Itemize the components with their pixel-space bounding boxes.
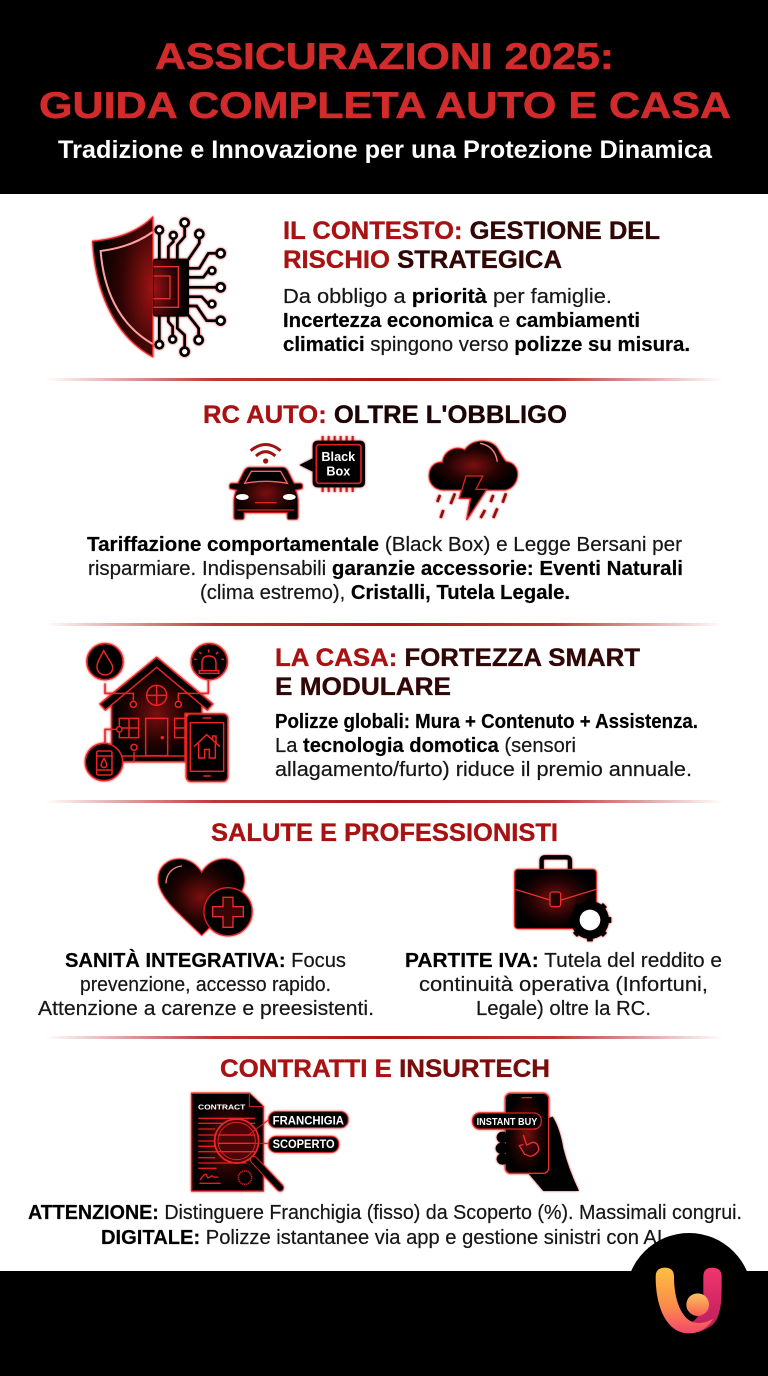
icon: black box chip: Black [321, 450, 356, 464]
subtitle: Tradizione e Innovazione per una Protezione Dinamica [58, 136, 713, 164]
body text: (clima estremo), Cristalli, Tutela Legale. [200, 582, 570, 604]
text: sanità integrativa: SANITÀ INTEGRATIVA: Focus [65, 949, 346, 972]
body text: Tariffazione comportamentale (Black Box) e Legge Bersani per [87, 534, 682, 556]
body text: Polizze globali: Mura + Contenuto + Assistenza. [275, 711, 698, 733]
body text: La tecnologia domotica (sensori [275, 735, 576, 757]
body text: Da obbligo a priorità per famiglie. [283, 286, 612, 308]
body text: risparmiare. Indispensabili garanzie accessorie: Eventi Naturali [88, 558, 683, 580]
body text [275, 711, 698, 781]
panel: salute e professionisti [38, 819, 722, 1020]
icon: hand with phone: INSTANT BUY [477, 1117, 538, 1128]
text: partite iva: continuità operativa (Infortuni, [419, 974, 708, 996]
footer bar [0, 1271, 768, 1376]
icon: briefcase with gear [515, 857, 611, 941]
body text: ATTENZIONE: Distinguere Franchigia (fisso) da Scoperto (%). Massimali congrui. [28, 1202, 742, 1224]
icon: heart with cross [158, 859, 252, 936]
heading: il contesto: IL CONTESTO: GESTIONE DEL [283, 217, 660, 245]
panel: il contesto [93, 217, 690, 357]
text: sanità integrativa: Attenzione a carenze e preesistenti. [38, 998, 374, 1020]
text: sanità integrativa [38, 949, 374, 1020]
body text [283, 286, 690, 356]
icon: black box chip: Box [326, 465, 350, 479]
title line 2: GUIDA COMPLETA AUTO E CASA [39, 85, 731, 126]
icon: shield with circuit [93, 217, 225, 357]
icon: contract and magnifier [192, 1093, 280, 1191]
icon: black box chip [299, 436, 365, 492]
logo badge [626, 1233, 752, 1359]
heading: la casa: LA CASA: FORTEZZA SMART [275, 644, 640, 672]
body text: Incertezza economica e cambiamenti [283, 310, 640, 332]
heading line 2: E MODULARE [275, 673, 451, 701]
icon: hand with phone [473, 1093, 579, 1191]
panel: la casa [85, 644, 698, 781]
text: sanità integrativa: prevenzione, accesso rapido. [80, 974, 331, 996]
text: partite iva: PARTITE IVA: Tutela del reddito e [405, 950, 722, 972]
label: scoperto: SCOPERTO [273, 1137, 335, 1151]
text: partite iva: Legale) oltre la RC. [476, 998, 651, 1020]
panel: rc auto [87, 401, 683, 604]
body text [87, 534, 683, 604]
heading line 2: RISCHIO STRATEGICA [283, 246, 562, 274]
body text [28, 1202, 742, 1249]
icon: smart house [85, 644, 228, 781]
icon: contract and magnifier: CONTRACT [198, 1103, 246, 1112]
text: partite iva [405, 950, 722, 1020]
body text: climatici spingono verso polizze su misura. [283, 334, 690, 356]
heading: CONTRATTI E INSURTECH [220, 1055, 550, 1083]
icon: storm cloud [429, 441, 517, 520]
icon: connected car [230, 444, 302, 519]
heading: rc auto: RC AUTO: OLTRE L'OBBLIGO [203, 401, 567, 429]
panel: contratti e insurtech [28, 1055, 742, 1249]
body text: DIGITALE: Polizze istantanee via app e gestione sinistri con AI. [101, 1227, 668, 1249]
label: franchigia: FRANCHIGIA [273, 1113, 344, 1127]
heading: SALUTE E PROFESSIONISTI [211, 819, 558, 847]
body text: allagamento/furto) riduce il premio annuale. [275, 759, 692, 781]
header banner [0, 0, 768, 194]
title line 1: ASSICURAZIONI 2025: [155, 36, 614, 77]
